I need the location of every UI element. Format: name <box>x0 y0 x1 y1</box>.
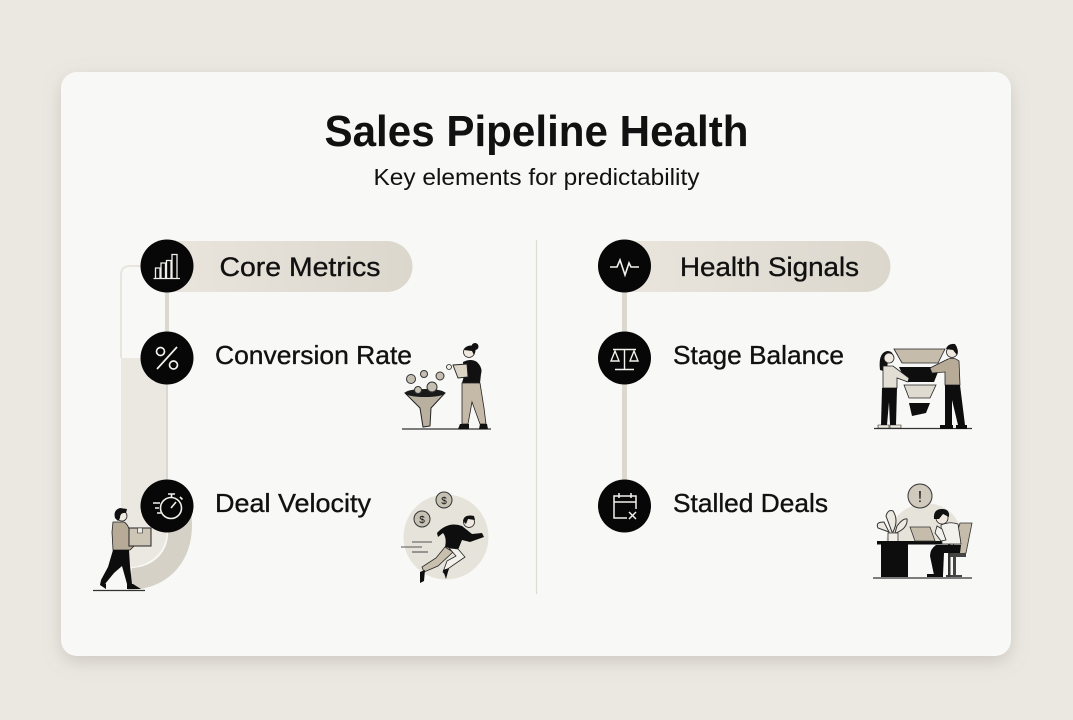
illustration: runner with coins <box>401 492 488 583</box>
title: Sales Pipeline Health <box>324 107 748 156</box>
subtitle: Key elements for predictability <box>374 164 700 190</box>
man <box>946 346 958 358</box>
label: Stalled Deals: Stalled Deals <box>673 488 828 518</box>
icon: scales badge <box>598 332 651 384</box>
woman <box>880 351 893 372</box>
center divider <box>536 240 538 594</box>
label: Stage Balance: Stage Balance <box>673 340 844 370</box>
illustration: worried person at desk <box>873 484 972 578</box>
illustration: two people with funnel <box>874 344 972 429</box>
icon: stopwatch badge <box>140 480 194 532</box>
person <box>936 512 948 524</box>
illustration: worried person at desk: ! <box>918 489 922 506</box>
header pill: Health Signals <box>625 241 890 292</box>
icon: bar chart badge <box>140 240 194 292</box>
illustration: coins into funnel with analyst <box>402 343 491 429</box>
person <box>472 343 478 350</box>
chair <box>950 523 972 556</box>
icon: pulse badge <box>598 240 651 292</box>
header pill: Core Metrics <box>167 241 413 292</box>
laptop <box>910 527 935 541</box>
illustration: person carrying box <box>93 508 151 590</box>
row: Stalled Deals <box>598 480 828 532</box>
icon: percent badge <box>140 332 194 384</box>
desk <box>877 541 954 544</box>
row: Stage Balance <box>598 332 844 384</box>
panel: main card <box>61 72 1011 656</box>
icon: calendar x badge <box>598 480 651 532</box>
header pill: Health Signals: Health Signals <box>680 252 859 282</box>
row: Conversion Rate <box>140 332 412 384</box>
label: Conversion Rate: Conversion Rate <box>215 340 412 370</box>
header pill: Core Metrics: Core Metrics <box>220 252 380 282</box>
illustration: runner with coins: $ <box>441 496 447 507</box>
plant <box>877 511 907 533</box>
illustration: runner with coins: $ <box>419 515 425 526</box>
row: Deal Velocity <box>140 480 371 532</box>
funnel <box>405 390 445 427</box>
timeline rail: left column <box>121 266 192 590</box>
timeline rail: right column <box>622 292 627 492</box>
label: Deal Velocity: Deal Velocity <box>215 488 371 518</box>
coins <box>406 370 444 394</box>
